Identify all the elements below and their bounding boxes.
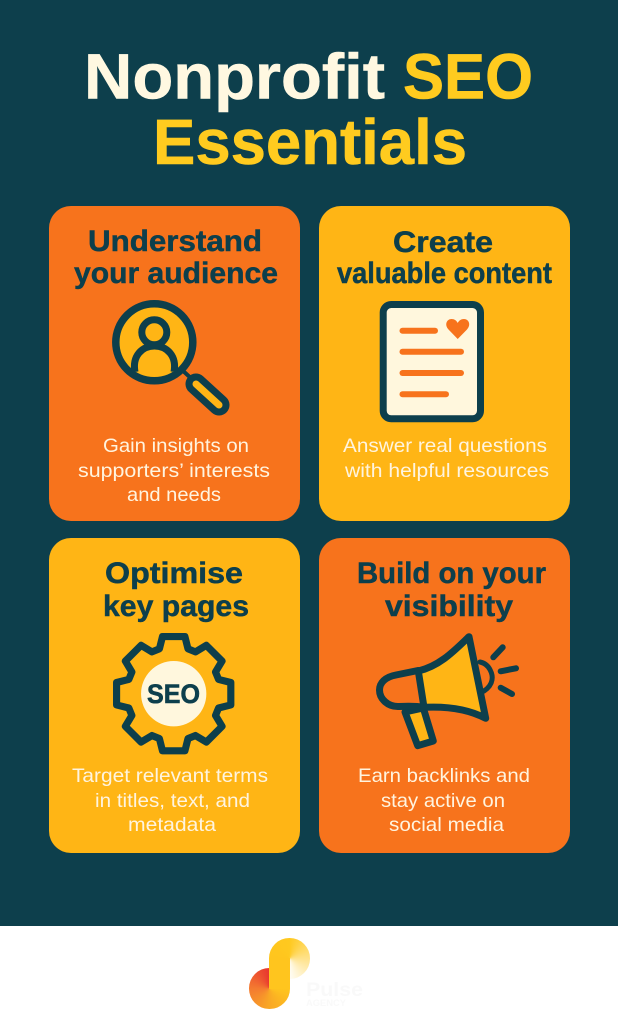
heading: build on your visibility: visibility <box>385 590 513 623</box>
panel: build on your visibility <box>319 538 570 853</box>
heading: build on your visibility: Build on your <box>357 557 546 590</box>
text: optimise key pages description: in titles, text, and <box>95 790 250 812</box>
icon: gear with SEO: SEO <box>147 679 200 709</box>
logo <box>249 938 310 1009</box>
text: optimise key pages description: metadata <box>128 814 216 836</box>
text: create valuable content description <box>343 435 549 482</box>
heading: understand your audience <box>74 225 278 290</box>
heading: create valuable content: valuable content <box>337 257 552 290</box>
icon: document with heart <box>383 304 480 419</box>
heading: create valuable content: Create <box>393 226 493 259</box>
text: create valuable content description: Answer real questions <box>343 435 547 457</box>
title: Nonprofit <box>84 40 385 112</box>
icon: gear with SEO <box>117 637 231 751</box>
panel: understand your audience <box>49 206 300 521</box>
heading: understand your audience: your audience <box>74 257 278 290</box>
icon: magnifying glass with person <box>116 304 219 405</box>
text: build on your visibility description: Earn backlinks and <box>358 765 530 787</box>
text: build on your visibility description <box>358 765 530 836</box>
text: create valuable content description: with helpful resources <box>344 460 549 482</box>
heading: optimise key pages <box>103 557 249 623</box>
text: understand your audience description: and needs <box>127 484 221 506</box>
text: build on your visibility description: social media <box>389 814 504 836</box>
text: optimise key pages description: Target relevant terms <box>72 765 268 787</box>
heading: build on your visibility <box>357 557 546 623</box>
title: Essentials <box>153 106 467 178</box>
panel: create valuable content <box>319 206 570 521</box>
text: understand your audience description: Gain insights on <box>103 435 249 457</box>
text: understand your audience description: supporters’ interests <box>78 460 270 482</box>
text: understand your audience description <box>78 435 270 506</box>
faint agency wordmark: Pulse <box>306 980 363 1001</box>
faint agency wordmark <box>306 980 363 1008</box>
text: optimise key pages description <box>72 765 268 836</box>
panel: optimise key pages <box>49 538 300 853</box>
icon: megaphone <box>380 637 516 746</box>
title <box>84 40 533 178</box>
heading: understand your audience: Understand <box>88 225 262 258</box>
heading: optimise key pages: Optimise <box>105 557 243 590</box>
heading: optimise key pages: key pages <box>103 590 249 623</box>
title: SEO <box>403 40 533 112</box>
heading: create valuable content <box>337 226 552 290</box>
text: build on your visibility description: stay active on <box>381 790 505 812</box>
faint agency wordmark: AGENCY <box>306 998 346 1008</box>
